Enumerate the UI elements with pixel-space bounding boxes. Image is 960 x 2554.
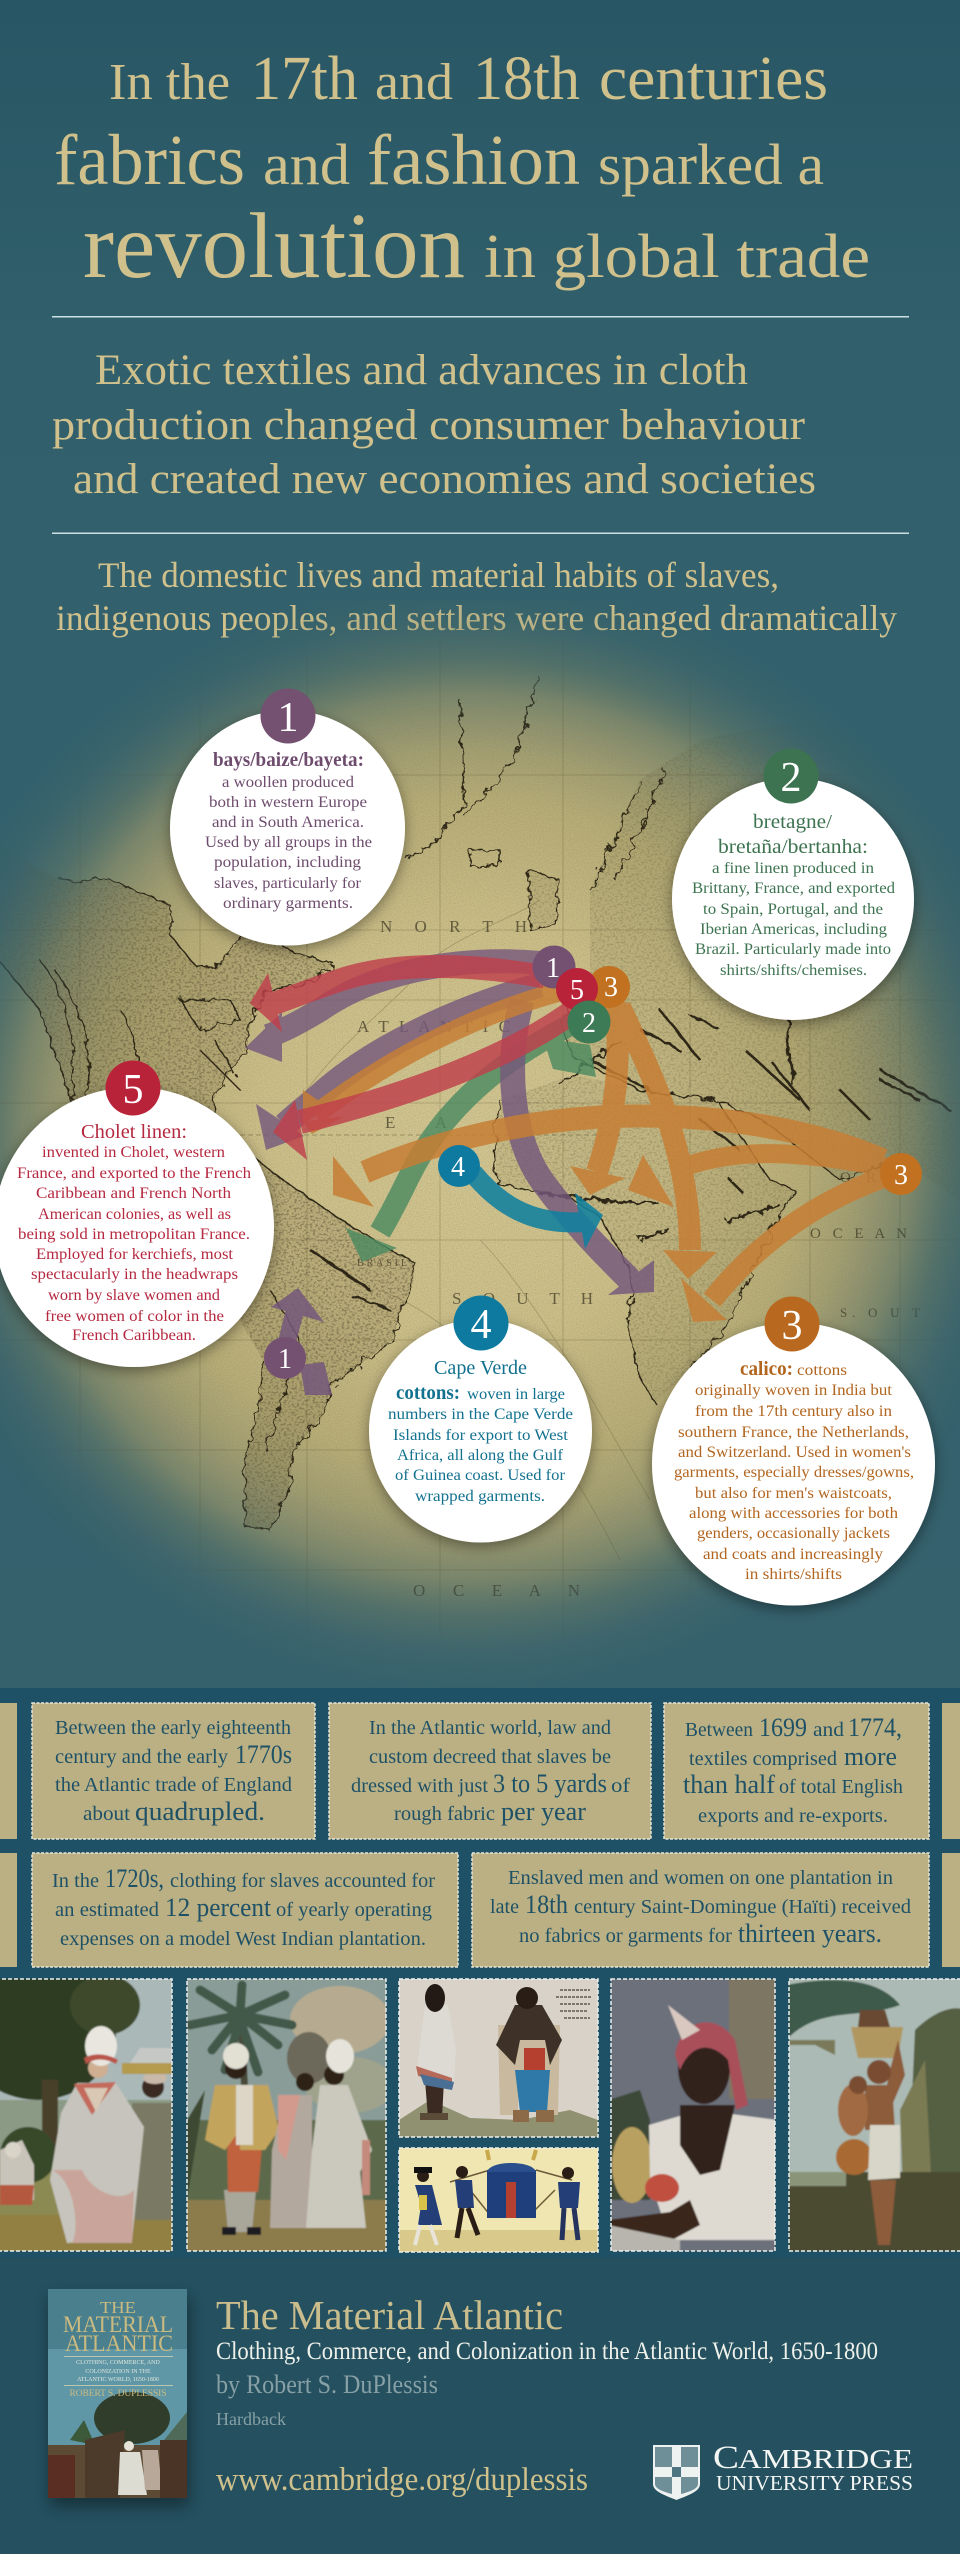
intro statement	[56, 555, 897, 638]
stat box 4: In the	[52, 1871, 99, 1892]
title: In the	[109, 54, 230, 111]
antique world map: A T L A N T I C	[357, 1017, 510, 1036]
stat box 5	[472, 1853, 929, 1967]
badge 1 South America	[264, 1337, 306, 1379]
stat box 2: 3 to 5 yards	[493, 1769, 607, 1798]
text: and in South America.	[212, 814, 364, 831]
title: and	[375, 54, 453, 111]
cover text: ROBERT S. DUPLESSIS	[70, 2389, 166, 2399]
subheading: production changed consumer behaviour	[52, 402, 805, 449]
book details: Hardback	[216, 2409, 286, 2429]
badge 3: 3	[604, 972, 618, 1003]
number circle: 3	[782, 1303, 802, 1349]
text: being sold in metropolitan France.	[18, 1226, 250, 1243]
text	[692, 811, 895, 979]
stat box 2: In the Atlantic world, law and	[369, 1718, 611, 1739]
cover text: CLOTHING, COMMERCE, AND	[76, 2360, 160, 2366]
cover text: THE	[100, 2298, 136, 2317]
number circle: 2	[780, 755, 802, 801]
text: Brazil. Particularly made into	[695, 941, 891, 958]
text: Brittany, France, and exported	[692, 880, 895, 897]
stat box 1: century and the early	[55, 1747, 228, 1768]
map number badges	[264, 946, 922, 1379]
text: Employed for kerchiefs, most	[36, 1246, 234, 1263]
wordmark	[713, 2440, 913, 2495]
stat box 4: expenses on a model West Indian plantation.	[60, 1929, 426, 1950]
text: bretaña/bertanha:	[718, 836, 868, 858]
text: genders, occasionally jackets	[697, 1525, 890, 1542]
stat box 3: of total English	[779, 1777, 903, 1798]
badge 2	[568, 1000, 610, 1044]
badge 3 east	[880, 1153, 922, 1195]
badge 2: 2	[582, 1008, 596, 1039]
painting: woman with headwrap and attendant	[0, 1960, 175, 2256]
stat box 5: century Saint-Domingue (Haïti) received	[574, 1897, 911, 1918]
intro statement: indigenous peoples, and settlers were changed dramatically	[56, 598, 897, 638]
antique world map: E A	[385, 1113, 448, 1132]
subheading	[52, 347, 816, 503]
text	[388, 1357, 573, 1505]
stat box 2: of	[611, 1776, 631, 1797]
title	[54, 45, 870, 298]
stat box 1: about	[83, 1804, 131, 1825]
callout 5: Cholet linen	[0, 1060, 274, 1367]
text: Used by all groups in the	[205, 834, 372, 851]
badge 5: 5	[570, 975, 584, 1006]
stat box 3: 1699	[759, 1713, 807, 1742]
text: French Caribbean.	[72, 1327, 196, 1344]
arrows: calico routes	[333, 1003, 885, 1322]
wordmark: C	[713, 2440, 739, 2476]
antique world map: S O U T H	[452, 1289, 593, 1308]
number circle: 4	[470, 1302, 492, 1348]
publisher logo	[653, 2440, 913, 2500]
text: in shirts/shifts	[745, 1566, 842, 1583]
text: to Spain, Portugal, and the	[703, 901, 883, 918]
title: in global trade	[484, 223, 870, 291]
number circle	[454, 1296, 508, 1350]
number circle	[764, 1296, 820, 1352]
callout 3: calico	[652, 1296, 935, 1606]
arrow: Cape Verde cottons to Gulf of Guinea	[473, 1173, 603, 1249]
book details: by Robert S. DuPlessis	[216, 2370, 438, 2399]
stat box 3: 1774,	[848, 1713, 902, 1742]
book details: www.cambridge.org/duplessis	[216, 2462, 588, 2498]
stat box 2	[329, 1703, 651, 1839]
text: free women of color in the	[45, 1308, 224, 1325]
badge 1	[532, 946, 576, 988]
antique world map: O C E A N	[413, 1581, 580, 1600]
callout 1: bays	[170, 688, 405, 946]
stat box 5: 18th	[525, 1890, 568, 1919]
text: bretagne/	[753, 811, 832, 833]
text: population, including	[214, 854, 361, 871]
cover text	[63, 2298, 173, 2399]
stat box 3: more	[844, 1742, 897, 1771]
text: wrapped garments.	[415, 1488, 545, 1505]
antique world map: BRASIL	[357, 1258, 407, 1269]
stat box 1: Between the early eighteenth	[55, 1718, 291, 1739]
badge 3 east: 3	[894, 1160, 908, 1191]
antique world map: O C E A N	[810, 1226, 907, 1242]
book details	[216, 2292, 878, 2498]
text	[205, 749, 372, 912]
arrow: bays to North America	[245, 961, 540, 1062]
badge 3	[588, 966, 630, 1008]
badge 4	[438, 1145, 480, 1187]
stat box 4	[32, 1853, 458, 1967]
page background	[0, 0, 960, 1700]
stat box 3: Between	[685, 1720, 753, 1741]
cover text: COLONIZATION IN THE	[85, 2369, 151, 2375]
text: originally woven in India but	[695, 1382, 893, 1399]
stat box 1	[32, 1703, 315, 1839]
stat box 3: than half	[683, 1770, 775, 1799]
side stubs	[0, 1703, 960, 1967]
arrow: bays in South America	[271, 1288, 332, 1395]
text: Caribbean and French North	[36, 1185, 231, 1202]
badge 5	[556, 968, 598, 1010]
text: worn by slave women and	[48, 1287, 220, 1304]
book details: The Material Atlantic	[216, 2292, 563, 2338]
lower band background	[0, 1688, 960, 2260]
title: sparked a	[598, 132, 824, 197]
text: invented in Cholet, western	[42, 1144, 225, 1161]
title: 17th	[251, 45, 358, 113]
stat box 2: per year	[501, 1797, 586, 1826]
text: and Switzerland. Used in women's	[678, 1444, 911, 1461]
arrow: bays down to West Africa	[513, 1000, 654, 1295]
stat box 4: of yearly operating	[276, 1900, 432, 1921]
painting: two Indigenous figures in cloaks	[399, 1979, 598, 2137]
painting: woman with pineapple	[608, 1976, 778, 2256]
stat box 4: 12 percent	[165, 1893, 272, 1922]
icon: Cambridge shield	[653, 2445, 700, 2500]
footer background	[0, 2258, 960, 2554]
antique world map: O R T	[840, 1170, 900, 1186]
stat box 3: exports and re-exports.	[698, 1806, 888, 1827]
title: 18th	[473, 45, 580, 113]
text: a fine linen produced in	[712, 860, 874, 877]
stat box 5: thirteen years.	[738, 1919, 882, 1948]
stat box 5: late	[490, 1897, 519, 1918]
cover text: ATLANTIC	[65, 2331, 173, 2356]
arrow: bays to Caribbean	[256, 985, 540, 1150]
stat box 1: the Atlantic trade of England	[55, 1775, 292, 1796]
stat box 4: an estimated	[55, 1900, 159, 1921]
text: cottons:	[396, 1382, 460, 1404]
text	[674, 1358, 914, 1583]
arrow: Cholet to North America	[250, 966, 545, 1032]
stat box 4: clothing for slaves accounted for	[170, 1871, 436, 1892]
text: ordinary garments.	[223, 895, 353, 912]
title: revolution	[83, 195, 465, 298]
text: American colonies, as well as	[38, 1206, 231, 1223]
stat box 1: 1770s	[235, 1740, 292, 1769]
cover painting	[48, 2392, 187, 2498]
number circle: 5	[122, 1067, 144, 1113]
text: woven in large	[467, 1386, 565, 1403]
text: of Guinea coast. Used for	[395, 1467, 566, 1484]
stat box 5: no fabrics or garments for	[519, 1926, 733, 1947]
cover text: ATLANTIC WORLD, 1650-1800	[77, 2377, 159, 2383]
antique world map: S. O U T	[840, 1305, 920, 1320]
subheading: Exotic textiles and advances in cloth	[95, 347, 748, 394]
text: from the 17th century also in	[695, 1403, 892, 1420]
number circle	[260, 688, 316, 744]
title: fabrics	[54, 120, 245, 200]
badge 1 South America: 1	[278, 1344, 292, 1375]
painting: man and two women in white	[184, 1976, 395, 2256]
number circle: 1	[278, 695, 298, 741]
text: garments, especially dresses/gowns,	[674, 1464, 914, 1481]
stat box 3: textiles comprised	[689, 1749, 837, 1770]
text: Cholet linen:	[81, 1121, 187, 1143]
subheading: and created new economies and societies	[73, 456, 816, 503]
antique world map: N O R T H	[380, 917, 527, 936]
text: spectacularly in the headwraps	[31, 1266, 238, 1283]
wordmark: AMBRIDGE	[738, 2444, 913, 2474]
text: slaves, particularly for	[214, 875, 362, 892]
stat box 4: 1720s,	[105, 1864, 164, 1893]
text: both in western Europe	[209, 794, 367, 811]
intro statement: The domestic lives and material habits of slaves,	[98, 555, 779, 595]
painting: woman carrying basket and child	[786, 1976, 960, 2256]
trade route arrows	[245, 961, 885, 1395]
stat box 2: dressed with just	[351, 1776, 489, 1797]
stat box 2: rough fabric	[394, 1804, 495, 1825]
text: along with accessories for both	[689, 1505, 898, 1522]
badge 4: 4	[451, 1152, 465, 1183]
wordmark: UNIVERSITY PRESS	[716, 2471, 913, 2495]
callout 4: Cape Verde cottons	[369, 1296, 592, 1542]
stat box 1: quadrupled.	[135, 1797, 265, 1826]
text: Iberian Americas, including	[700, 921, 887, 938]
text: France, and exported to the French	[17, 1165, 251, 1182]
text: southern France, the Netherlands,	[678, 1424, 909, 1441]
stat box 3	[664, 1703, 929, 1839]
painting: sedan chair with bearers	[399, 2148, 598, 2252]
antique world map	[0, 600, 960, 1700]
arrow: bretagne to Brazil	[346, 1020, 596, 1262]
painting gallery	[0, 1960, 960, 2256]
text: a woollen produced	[222, 774, 354, 791]
arrow: Cholet to Caribbean	[273, 1010, 575, 1160]
stat box 5: Enslaved men and women on one plantation in	[508, 1868, 893, 1889]
text: and coats and increasingly	[703, 1546, 883, 1563]
stat box 2: custom decreed that slaves be	[369, 1747, 611, 1768]
text: Africa, all along the Gulf	[397, 1447, 564, 1464]
text: but also for men's waistcoats,	[695, 1485, 892, 1502]
badge 1: 1	[546, 953, 560, 984]
title: and	[263, 132, 350, 197]
statistics panels	[0, 1703, 960, 1967]
number circle	[106, 1060, 160, 1116]
title: centuries	[599, 45, 828, 113]
cover text: MATERIAL	[63, 2312, 173, 2337]
text: shirts/shifts/chemises.	[720, 962, 867, 979]
book details: Clothing, Commerce, and Colonization in the Atlantic World, 1650-1800	[216, 2338, 878, 2365]
title: fashion	[367, 120, 580, 200]
book cover	[48, 2289, 187, 2498]
stat box 3: and	[813, 1720, 844, 1741]
text	[17, 1121, 251, 1344]
text: Islands for export to West	[393, 1427, 569, 1444]
number circle	[764, 748, 818, 804]
arrow: calico to Caribbean	[303, 990, 565, 1134]
callout 2: bretagne	[672, 748, 914, 1020]
text: bays/baize/bayeta:	[213, 749, 364, 771]
text: calico:	[740, 1358, 793, 1380]
text: Cape Verde	[434, 1357, 527, 1379]
text: cottons	[797, 1362, 847, 1379]
text: numbers in the Cape Verde	[388, 1406, 573, 1423]
